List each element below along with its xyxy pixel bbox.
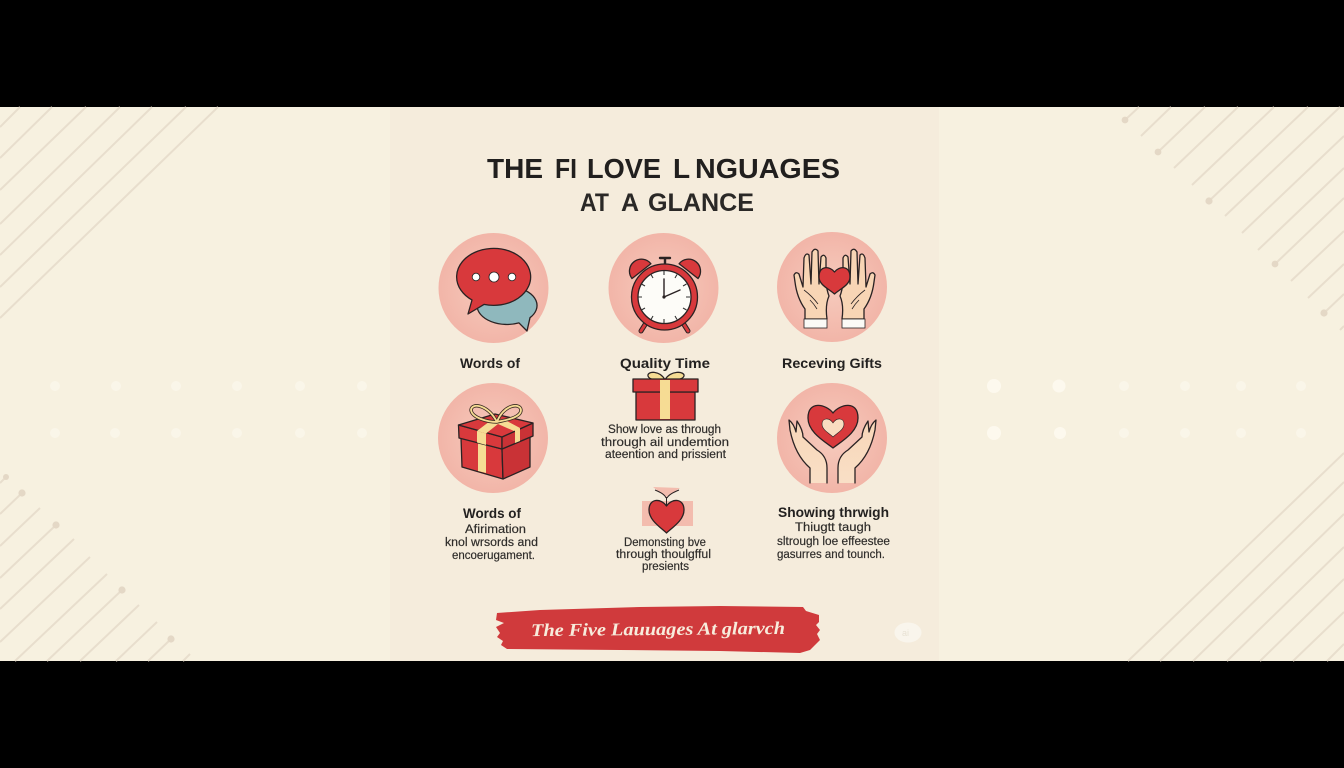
subtitle: AT bbox=[580, 189, 609, 217]
icon: inner heart bbox=[822, 419, 844, 437]
panel: heart in hands circle bbox=[777, 383, 887, 493]
text block: thoughtful presents: Demonsting bve bbox=[624, 537, 706, 549]
title: LOVE bbox=[587, 153, 661, 184]
icon: blue speech bubble bbox=[477, 286, 537, 331]
text block: physical touch: gasurres and tounch. bbox=[777, 549, 885, 561]
text block: physical touch bbox=[777, 504, 890, 561]
text block: quality time description bbox=[601, 424, 729, 461]
text block: words of affirmation: knol wrsords and bbox=[445, 537, 538, 549]
subtitle: A bbox=[621, 189, 639, 217]
text block: quality time description: through ail undemtion bbox=[601, 437, 729, 449]
label: words of: Words of bbox=[460, 355, 520, 371]
text block: physical touch: Thiugtt taugh bbox=[795, 522, 871, 534]
icon: right hand bbox=[840, 249, 875, 328]
watermark badge bbox=[894, 622, 922, 642]
icon: red speech bubble bbox=[457, 248, 531, 314]
panel: words of (speech bubbles) bbox=[438, 233, 548, 343]
icon: left open hand bbox=[789, 420, 827, 483]
banner bbox=[496, 606, 820, 653]
title: NGUAGES bbox=[695, 153, 840, 184]
text block: quality time description: ateention and prissient bbox=[605, 449, 727, 461]
title: FI bbox=[555, 153, 577, 184]
panel: quality time (alarm clock) bbox=[608, 233, 718, 343]
label: quality time: Quality Time bbox=[620, 355, 710, 371]
watermark badge: ai bbox=[902, 628, 909, 638]
title: L bbox=[673, 153, 690, 184]
icon: right open hand bbox=[838, 420, 876, 483]
icon: red heart bbox=[819, 268, 850, 294]
icon: large gift box bbox=[458, 406, 533, 479]
icon: small gift box bbox=[633, 372, 698, 420]
icon: alarm clock bbox=[625, 254, 705, 331]
text block: physical touch: Showing thrwigh bbox=[778, 504, 889, 520]
text block: words of affirmation: encoerugament. bbox=[452, 550, 535, 562]
subtitle: GLANCE bbox=[648, 189, 754, 217]
text block: quality time description: Show love as through bbox=[608, 424, 721, 436]
subtitle bbox=[580, 189, 754, 217]
panel: gift box circle bbox=[438, 383, 548, 493]
text block: physical touch: sltrough loe effeestee bbox=[777, 536, 890, 548]
label: receiving gifts: Receving Gifts bbox=[782, 355, 882, 371]
title bbox=[487, 153, 840, 184]
icon: large heart bbox=[808, 405, 858, 448]
title: THE bbox=[487, 153, 543, 184]
text block: words of affirmation: Words of bbox=[463, 505, 521, 521]
text block: thoughtful presents: through thoulgfful bbox=[616, 549, 711, 561]
icon: pendant heart bbox=[642, 487, 693, 533]
banner: The Five Lauuages At glarvch bbox=[531, 618, 785, 640]
text block: thoughtful presents bbox=[616, 537, 711, 573]
icon: left hand bbox=[794, 249, 829, 328]
text block: words of affirmation bbox=[445, 505, 538, 562]
text block: words of affirmation: Afirimation bbox=[465, 524, 526, 536]
text block: thoughtful presents: presients bbox=[642, 561, 689, 573]
panel: receiving gifts (hands holding heart) bbox=[777, 232, 887, 342]
